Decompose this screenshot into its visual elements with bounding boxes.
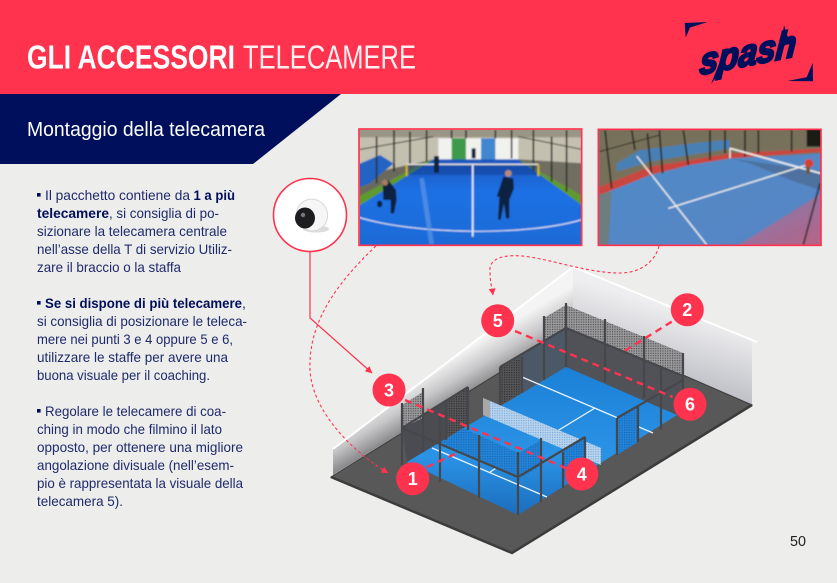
text block: third bullet: opposto, per ottenere una migliore bbox=[37, 439, 243, 455]
text block: first bullet: , si consiglia di po- bbox=[109, 205, 219, 221]
blue court surface bbox=[407, 367, 677, 515]
text block: first bullet: Il pacchetto contiene da bbox=[45, 187, 190, 203]
fence posts bbox=[357, 130, 585, 192]
marker 2 bbox=[671, 293, 704, 326]
marker 6: 6 bbox=[685, 395, 695, 415]
front mesh panels bbox=[440, 428, 518, 477]
text block: first bullet bbox=[37, 187, 235, 275]
arrow: camera to position 3 bbox=[310, 252, 372, 373]
title bbox=[27, 38, 416, 76]
header band bbox=[0, 0, 837, 94]
photo: view from camera 5 bbox=[596, 127, 824, 248]
text block: first bullet: telecamere bbox=[37, 205, 109, 221]
marker 4 bbox=[565, 458, 598, 490]
net bbox=[407, 164, 538, 175]
court lines bbox=[637, 148, 824, 245]
marker 4: 4 bbox=[577, 464, 587, 484]
fence frame bbox=[402, 303, 683, 515]
photo: view from central camera bbox=[357, 127, 585, 248]
camera sight lines bbox=[405, 322, 673, 469]
subtitle banner bbox=[0, 94, 341, 164]
players bbox=[377, 148, 514, 220]
subtitle text: Montaggio della telecamera bbox=[27, 119, 266, 141]
marker 5: 5 bbox=[493, 311, 503, 331]
text block: first bullet: 1 a più bbox=[194, 187, 235, 203]
marker 5 bbox=[481, 304, 514, 337]
marker 3 bbox=[372, 374, 406, 406]
wall: right bbox=[573, 267, 752, 405]
text block: third bullet: telecamera 5). bbox=[37, 493, 123, 509]
wall: left bbox=[333, 267, 573, 475]
text block: third bullet: Regolare le telecamere di coa- bbox=[45, 403, 226, 419]
fence posts bbox=[599, 130, 820, 245]
text block: second bullet: Se si dispone di più telecamere bbox=[45, 295, 242, 311]
arrow: photo 1 to position 1 bbox=[310, 246, 388, 473]
back glass panels bbox=[402, 387, 468, 462]
page number: 50 bbox=[790, 534, 806, 550]
text block: second bullet: mere nei punti 3 e 4 oppure 5 e 6, bbox=[37, 331, 233, 347]
text block: second bullet bbox=[37, 295, 247, 383]
marker 1 bbox=[396, 462, 429, 495]
title: GLI ACCESSORI bbox=[27, 38, 235, 76]
marker 2: 2 bbox=[682, 300, 692, 320]
player bbox=[805, 159, 813, 168]
text block: third bullet: ching in modo che filmino il lato bbox=[37, 421, 222, 437]
text block: first bullet: zare il braccio o la staffa bbox=[37, 259, 181, 275]
tennis net bbox=[483, 398, 601, 465]
text block: second bullet: si consiglia di posizionare le teleca- bbox=[37, 313, 247, 329]
text block: second bullet: utilizzare le staffe per avere una bbox=[37, 349, 228, 365]
marker 6 bbox=[674, 388, 706, 421]
padel court model bbox=[402, 303, 683, 515]
logo: spash: spash bbox=[698, 22, 798, 83]
arrow: photo 2 to position 5 bbox=[490, 246, 659, 295]
marker 3: 3 bbox=[384, 380, 394, 400]
title: TELECAMERE bbox=[243, 38, 416, 76]
text block: third bullet: angolazione divisuale (nell’esem- bbox=[37, 457, 234, 473]
back mesh panels bbox=[402, 392, 423, 428]
text block: first bullet: sizionare la telecamera centrale bbox=[37, 223, 227, 239]
court lines bbox=[432, 377, 653, 497]
text block: second bullet: , bbox=[242, 295, 246, 311]
marker 1: 1 bbox=[408, 469, 418, 489]
icon: camera callout bbox=[274, 178, 346, 252]
text block: first bullet: nell’asse della T di servizio Utiliz- bbox=[37, 241, 232, 257]
icon: dome camera bbox=[291, 193, 333, 237]
text block: third bullet: pio è rappresentata la visuale della bbox=[37, 475, 243, 491]
floor and walls of the court model bbox=[331, 267, 757, 553]
court lines bbox=[357, 164, 585, 244]
text block: third bullet bbox=[37, 403, 243, 509]
floor bbox=[331, 327, 752, 553]
text block: second bullet: buona visuale per il coaching. bbox=[37, 367, 210, 383]
